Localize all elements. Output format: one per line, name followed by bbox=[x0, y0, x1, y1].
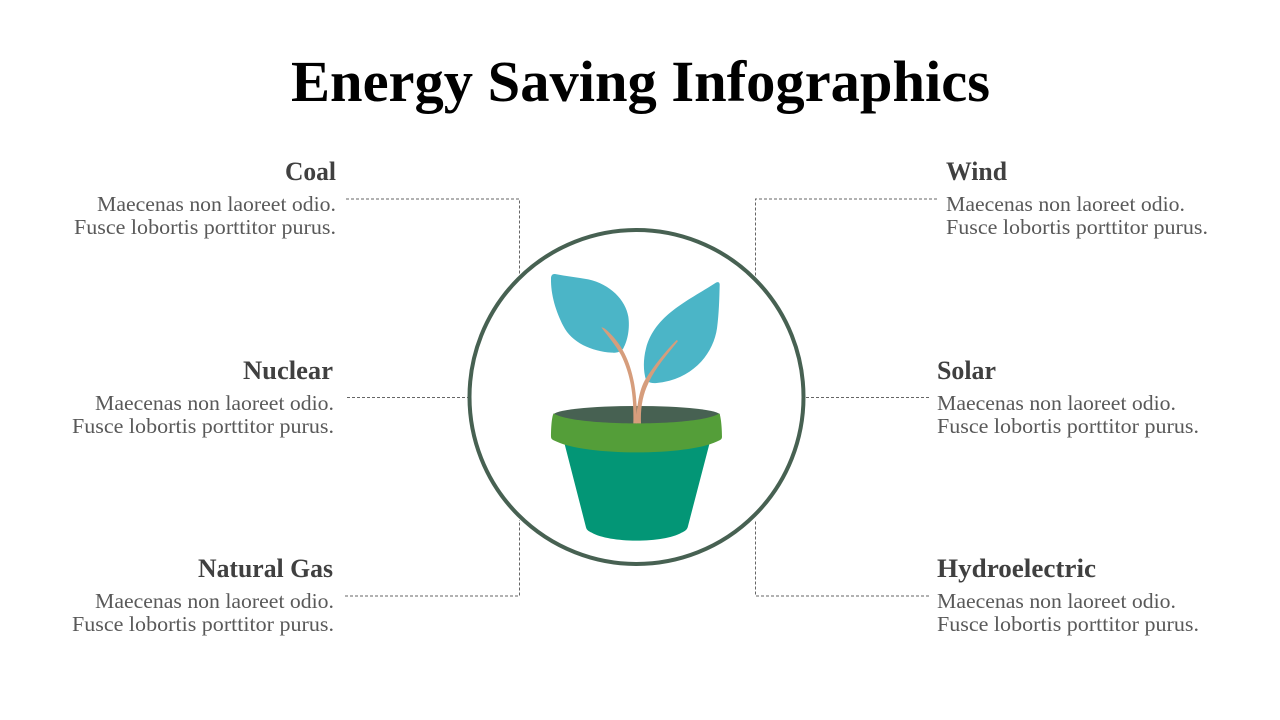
pot rim bbox=[551, 413, 722, 452]
title: Energy Saving Infographics bbox=[291, 49, 990, 114]
text: wind line 2: Fusce lobortis porttitor purus. bbox=[946, 215, 1208, 239]
pot soil bbox=[553, 406, 720, 424]
panel: hydroelectric bbox=[937, 554, 1199, 636]
heading: solar: Solar bbox=[937, 356, 996, 385]
connector: nuclear bbox=[347, 396, 468, 398]
heading: wind: Wind bbox=[946, 157, 1008, 186]
text: natural gas line 1: Maecenas non laoreet odio. bbox=[95, 589, 334, 613]
plant illustration bbox=[551, 274, 722, 541]
text: wind line 1: Maecenas non laoreet odio. bbox=[946, 192, 1185, 216]
text: nuclear line 2: Fusce lobortis porttitor purus. bbox=[72, 414, 334, 438]
text: hydroelectric line 1: Maecenas non laoreet odio. bbox=[937, 589, 1176, 613]
panel: solar bbox=[937, 356, 1199, 438]
text: nuclear line 1: Maecenas non laoreet odio. bbox=[95, 391, 334, 415]
text: hydroelectric line 2: Fusce lobortis porttitor purus. bbox=[937, 612, 1199, 636]
connector: natural gas bbox=[345, 520, 520, 596]
heading: natural gas: Natural Gas bbox=[198, 554, 333, 583]
heading: nuclear: Nuclear bbox=[243, 356, 333, 385]
connector: hydroelectric bbox=[756, 520, 929, 596]
connector: coal bbox=[346, 199, 520, 276]
text: natural gas line 2: Fusce lobortis porttitor purus. bbox=[72, 612, 334, 636]
text: solar line 2: Fusce lobortis porttitor purus. bbox=[937, 414, 1199, 438]
left leaf bbox=[551, 274, 629, 353]
panel: coal bbox=[74, 157, 336, 239]
circle outline bbox=[470, 230, 804, 564]
connector: wind bbox=[756, 199, 937, 276]
right stem bbox=[636, 340, 678, 423]
text: coal line 1: Maecenas non laoreet odio. bbox=[97, 192, 336, 216]
pot body bbox=[564, 442, 710, 541]
heading: hydroelectric: Hydroelectric bbox=[937, 554, 1096, 583]
panel: wind bbox=[946, 157, 1208, 239]
connector: solar bbox=[806, 396, 929, 398]
left stem bbox=[601, 327, 637, 423]
text: solar line 1: Maecenas non laoreet odio. bbox=[937, 391, 1176, 415]
right leaf bbox=[644, 282, 720, 383]
heading: coal: Coal bbox=[285, 157, 336, 186]
icon: potted plant in circle bbox=[470, 230, 804, 564]
text: coal line 2: Fusce lobortis porttitor purus. bbox=[74, 215, 336, 239]
panel: nuclear bbox=[72, 356, 334, 438]
panel: natural gas bbox=[72, 554, 334, 636]
stems bbox=[601, 327, 678, 423]
